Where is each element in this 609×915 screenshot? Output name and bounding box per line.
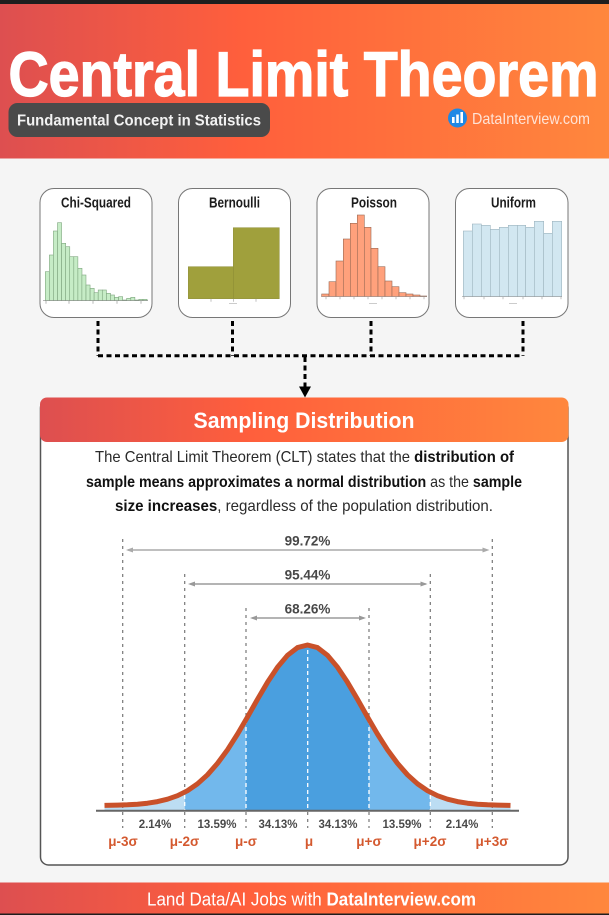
percentage labels: 34.13% <box>318 819 358 831</box>
panel: bernoulli card <box>178 188 290 318</box>
sampling distribution header bar <box>40 398 568 442</box>
panel: uniform card <box>456 188 568 318</box>
brand logo and name: DataInterview.com <box>472 111 590 128</box>
explanation text <box>86 449 522 515</box>
uniform histogram <box>463 221 562 297</box>
explanation text: The Central Limit Theorem (CLT) states that the distribution of <box>95 449 515 466</box>
panel: sampling distribution <box>40 398 568 865</box>
explanation text: sample means approximates a normal distribution as the sample <box>86 474 522 491</box>
explanation text: size increases, regardless of the population distribution. <box>115 498 493 515</box>
sigma axis labels <box>108 834 508 849</box>
uniform heading: Uniform <box>491 196 536 212</box>
baseline axis <box>96 810 519 812</box>
percentage labels: 2.14% <box>446 819 478 831</box>
99.72% range arrow: 99.72% <box>285 534 330 548</box>
footer banner <box>0 882 609 914</box>
bernoulli histogram <box>188 228 279 299</box>
95.44% range arrow: 95.44% <box>285 568 330 582</box>
99.72% range arrow <box>126 534 490 552</box>
percentage labels: 34.13% <box>258 819 298 831</box>
footer banner: Land Data/AI Jobs with DataInterview.com <box>147 888 476 910</box>
sigma axis labels: μ-3σ <box>108 834 138 849</box>
sigma axis labels: μ+σ <box>356 834 382 849</box>
subtitle pill <box>8 103 270 137</box>
chi-squared heading: Chi-Squared <box>61 196 131 212</box>
arrow: down to sampling distribution <box>299 357 311 398</box>
bernoulli heading: Bernoulli <box>209 196 260 212</box>
68.26% range arrow <box>250 602 366 620</box>
68.26% range arrow: 68.26% <box>285 602 330 616</box>
percentage labels <box>139 819 478 831</box>
percentage labels: 13.59% <box>382 819 422 831</box>
subtitle pill: Fundamental Concept in Statistics <box>17 112 261 130</box>
poisson heading: Poisson <box>351 196 397 212</box>
sampling distribution header bar: Sampling Distribution <box>194 408 414 433</box>
sigma guide lines <box>123 539 492 828</box>
header banner <box>0 4 609 158</box>
sigma axis labels: μ+2σ <box>414 834 446 849</box>
shaded areas under curve <box>100 640 515 812</box>
brand logo and name <box>448 108 590 128</box>
95.44% range arrow <box>188 568 428 586</box>
percentage labels: 2.14% <box>139 819 171 831</box>
dashed connectors from cards to sampling distribution <box>98 321 523 356</box>
chi-squared histogram <box>45 223 147 301</box>
sigma axis labels: μ-2σ <box>170 834 199 849</box>
poisson histogram <box>322 215 427 297</box>
panel: chi-squared card <box>40 188 152 318</box>
bell curve <box>104 645 510 805</box>
panel: poisson card <box>317 188 429 318</box>
normal distribution chart <box>96 534 519 849</box>
percentage labels: 13.59% <box>197 819 237 831</box>
sigma axis labels: μ-σ <box>235 834 257 849</box>
sigma axis labels: μ <box>305 834 313 849</box>
sigma axis labels: μ+3σ <box>476 834 508 849</box>
